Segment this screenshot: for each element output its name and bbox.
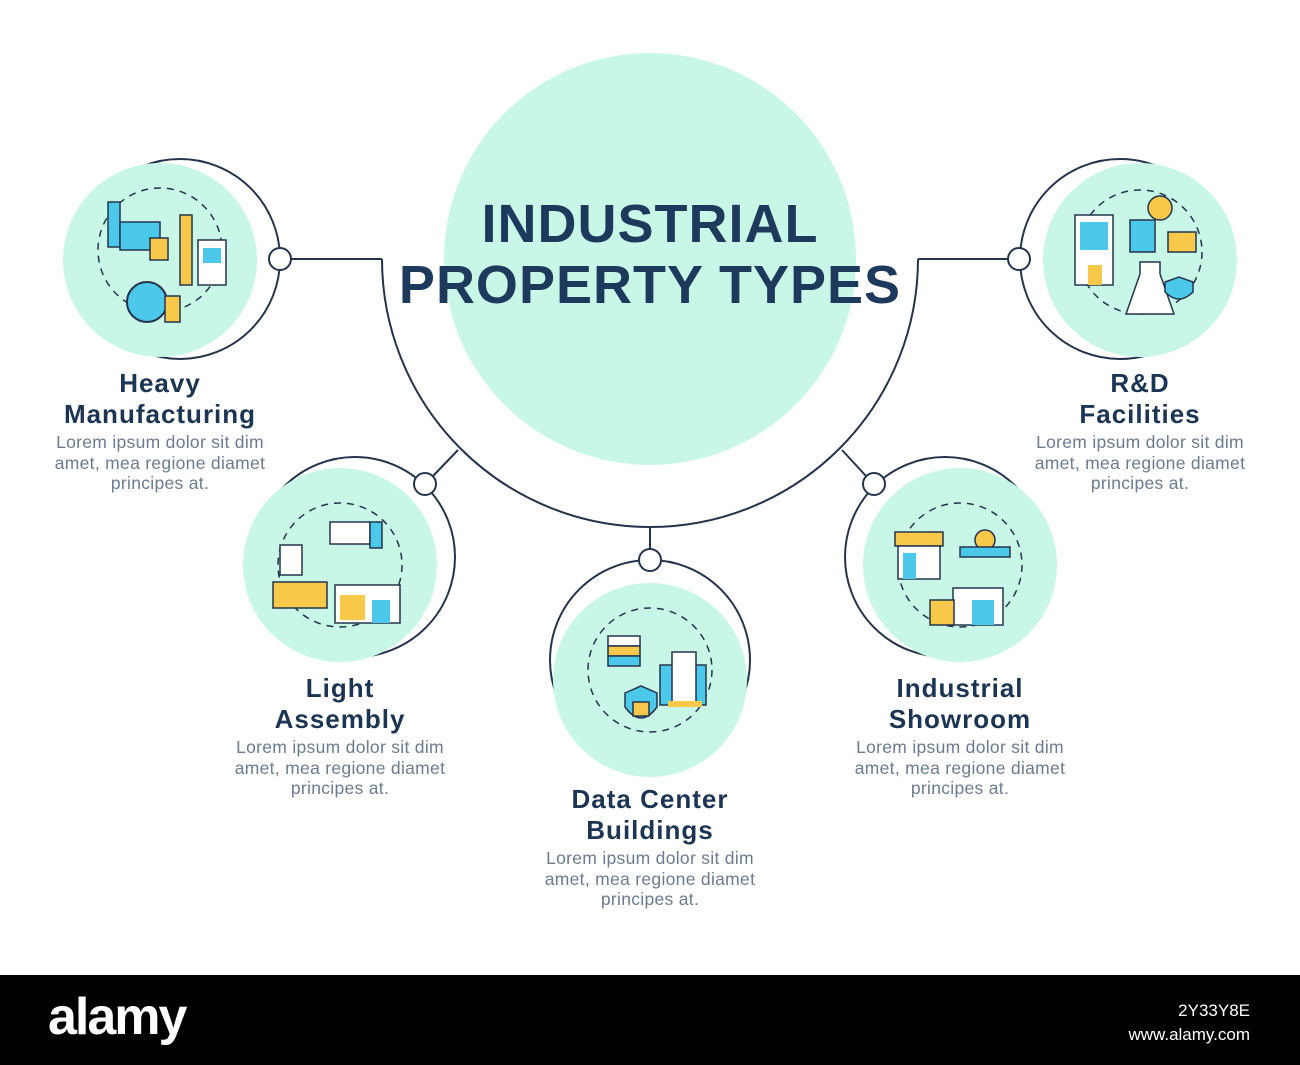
text: light assembly: Assembly <box>275 704 405 734</box>
text: data center: Buildings <box>586 815 714 845</box>
text: showroom: Lorem ipsum dolor sit dim <box>856 737 1064 757</box>
text: showroom: principes at. <box>911 778 1009 798</box>
text: heavy manufacturing: Manufacturing <box>64 399 256 429</box>
node: data center <box>550 549 750 777</box>
logo: alamy <box>48 988 185 1046</box>
text: showroom: amet, mea regione diamet <box>855 758 1065 778</box>
text: heavy manufacturing: Lorem ipsum dolor sit dim <box>56 432 264 452</box>
title: PROPERTY TYPES <box>399 255 901 315</box>
center circle <box>444 53 856 465</box>
text: data center <box>545 784 755 909</box>
node: heavy <box>63 159 291 359</box>
text: heavy manufacturing <box>55 368 265 493</box>
text: showroom: Showroom <box>889 704 1031 734</box>
text: showroom <box>855 673 1065 798</box>
text: data center: Data Center <box>572 784 728 814</box>
text: heavy manufacturing: Heavy <box>119 368 201 398</box>
connecting arc <box>291 259 1008 549</box>
text: light assembly <box>235 673 445 798</box>
title: INDUSTRIAL <box>482 194 818 254</box>
text: heavy manufacturing: amet, mea regione diamet <box>55 452 265 472</box>
text: light assembly: Light <box>306 673 374 703</box>
text: data center: amet, mea regione diamet <box>545 868 755 888</box>
node: light assembly <box>243 457 455 662</box>
node: R&D <box>1008 159 1237 359</box>
text: data center: principes at. <box>601 889 699 909</box>
text: showroom: Industrial <box>896 673 1024 703</box>
text: data center: Lorem ipsum dolor sit dim <box>546 848 754 868</box>
text: R&D: principes at. <box>1091 473 1189 493</box>
text: R&D: amet, mea regione diamet <box>1035 452 1245 472</box>
text: light assembly: principes at. <box>291 778 389 798</box>
url: www.alamy.com <box>1128 1025 1250 1044</box>
footer bar <box>0 975 1300 1065</box>
node: showroom <box>845 457 1057 662</box>
text: light assembly: amet, mea regione diamet <box>235 758 445 778</box>
text: R&D: Facilities <box>1079 399 1201 429</box>
title <box>399 194 901 315</box>
text: heavy manufacturing: principes at. <box>111 473 209 493</box>
text: R&D: Lorem ipsum dolor sit dim <box>1036 432 1244 452</box>
text: R&D: R&D <box>1110 368 1170 398</box>
text: light assembly: Lorem ipsum dolor sit dim <box>236 737 444 757</box>
image id: 2Y33Y8E <box>1178 1001 1250 1020</box>
text: R&D <box>1035 368 1245 493</box>
